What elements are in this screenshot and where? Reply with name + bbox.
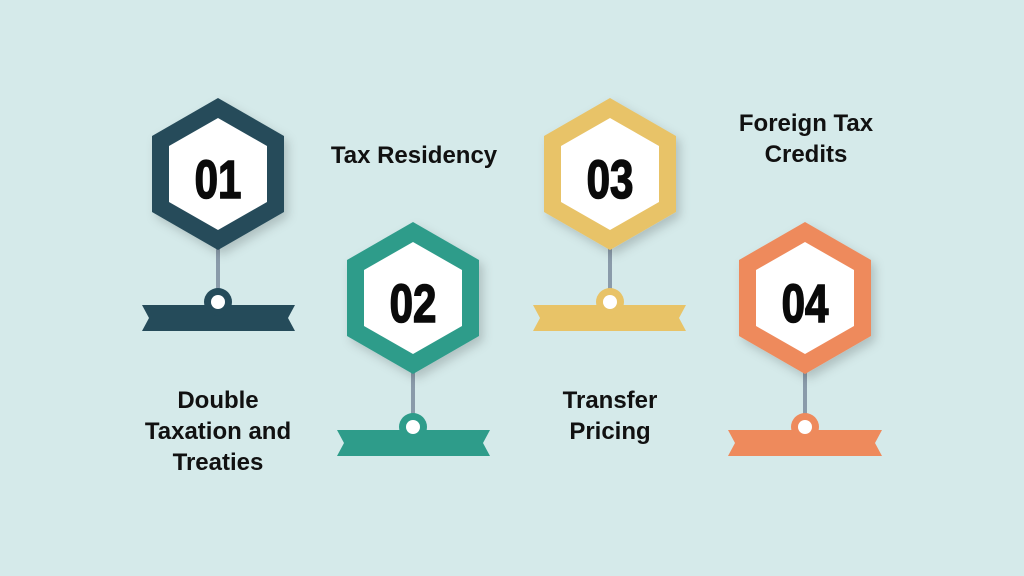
label: Transfer Pricing: Pricing — [569, 418, 651, 445]
ribbon 03 — [533, 305, 686, 331]
label: Double Taxation and Treaties: Double — [177, 387, 259, 414]
step 04 — [728, 222, 882, 456]
label: Transfer Pricing: Transfer — [563, 387, 657, 414]
ribbon 01 — [142, 305, 295, 331]
label: Foreign Tax Credits: Credits — [765, 141, 847, 168]
hexagon 01 — [152, 98, 284, 250]
label: Double Taxation and Treaties: Taxation and — [145, 418, 291, 445]
step 02: 02 — [390, 274, 436, 334]
label: Double Taxation and Treaties: Treaties — [173, 449, 263, 476]
hexagon 02 — [347, 222, 479, 374]
ribbon 02 — [337, 430, 490, 456]
step 04: 04 — [782, 274, 828, 334]
ribbon 04 — [728, 430, 882, 456]
step 03: 03 — [587, 150, 633, 210]
hexagon 04 — [739, 222, 871, 374]
hexagon 03 — [544, 98, 676, 250]
label: Tax Residency: Tax Residency — [331, 142, 498, 169]
step 03 — [533, 98, 686, 331]
label: Foreign Tax Credits: Foreign Tax — [739, 110, 874, 137]
step 02 — [337, 222, 490, 456]
step 01 — [142, 98, 295, 331]
step 01: 01 — [195, 150, 241, 210]
